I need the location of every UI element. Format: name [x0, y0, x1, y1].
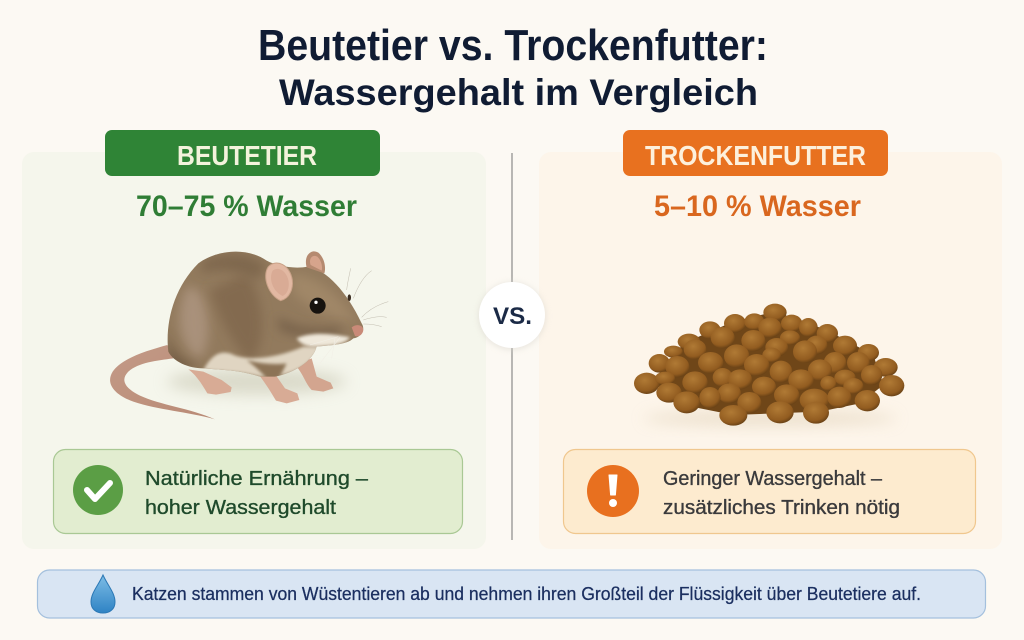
- footer text: Katzen stammen von Wüstentieren ab und nehmen ihren Großteil der Flüssigkeit über Beutetiere auf.: [132, 584, 921, 604]
- title: [258, 21, 768, 113]
- callout text: Natürliche Ernährung –: [145, 468, 369, 490]
- title: Beutetier vs. Trockenfutter:: [258, 21, 768, 70]
- heading badge: Beutetier: BEUTETIER: [177, 140, 317, 171]
- icon: water drop: [91, 575, 115, 613]
- heading badge: Trockenfutter: [623, 130, 888, 176]
- icon: kibble pile: [634, 304, 904, 426]
- icon: rat illustration: [110, 251, 388, 419]
- callout: natural diet: [54, 450, 462, 534]
- callout: low water content: [564, 450, 976, 534]
- title: Wassergehalt im Vergleich: [279, 72, 758, 113]
- callout text: Geringer Wassergehalt –: [663, 468, 883, 490]
- callout text: zusätzliches Trinken nötig: [663, 497, 900, 519]
- water value: Beutetier: 70–75 % Wasser: [136, 190, 357, 223]
- panel: Beutetier: [22, 152, 486, 549]
- icon: warning: [587, 465, 639, 517]
- icon: check mark: [73, 465, 123, 515]
- divider: [511, 153, 513, 540]
- panel: Trockenfutter: [539, 152, 1002, 549]
- footer note: [38, 570, 986, 618]
- heading badge: Beutetier: [105, 130, 380, 176]
- callout text: hoher Wassergehalt: [145, 497, 336, 519]
- callout text: [663, 468, 900, 519]
- vs badge: [478, 282, 546, 350]
- vs badge: VS.: [493, 303, 532, 330]
- water value: Trockenfutter: 5–10 % Wasser: [654, 190, 861, 223]
- heading badge: Trockenfutter: TROCKENFUTTER: [645, 140, 866, 171]
- callout text: [145, 468, 369, 519]
